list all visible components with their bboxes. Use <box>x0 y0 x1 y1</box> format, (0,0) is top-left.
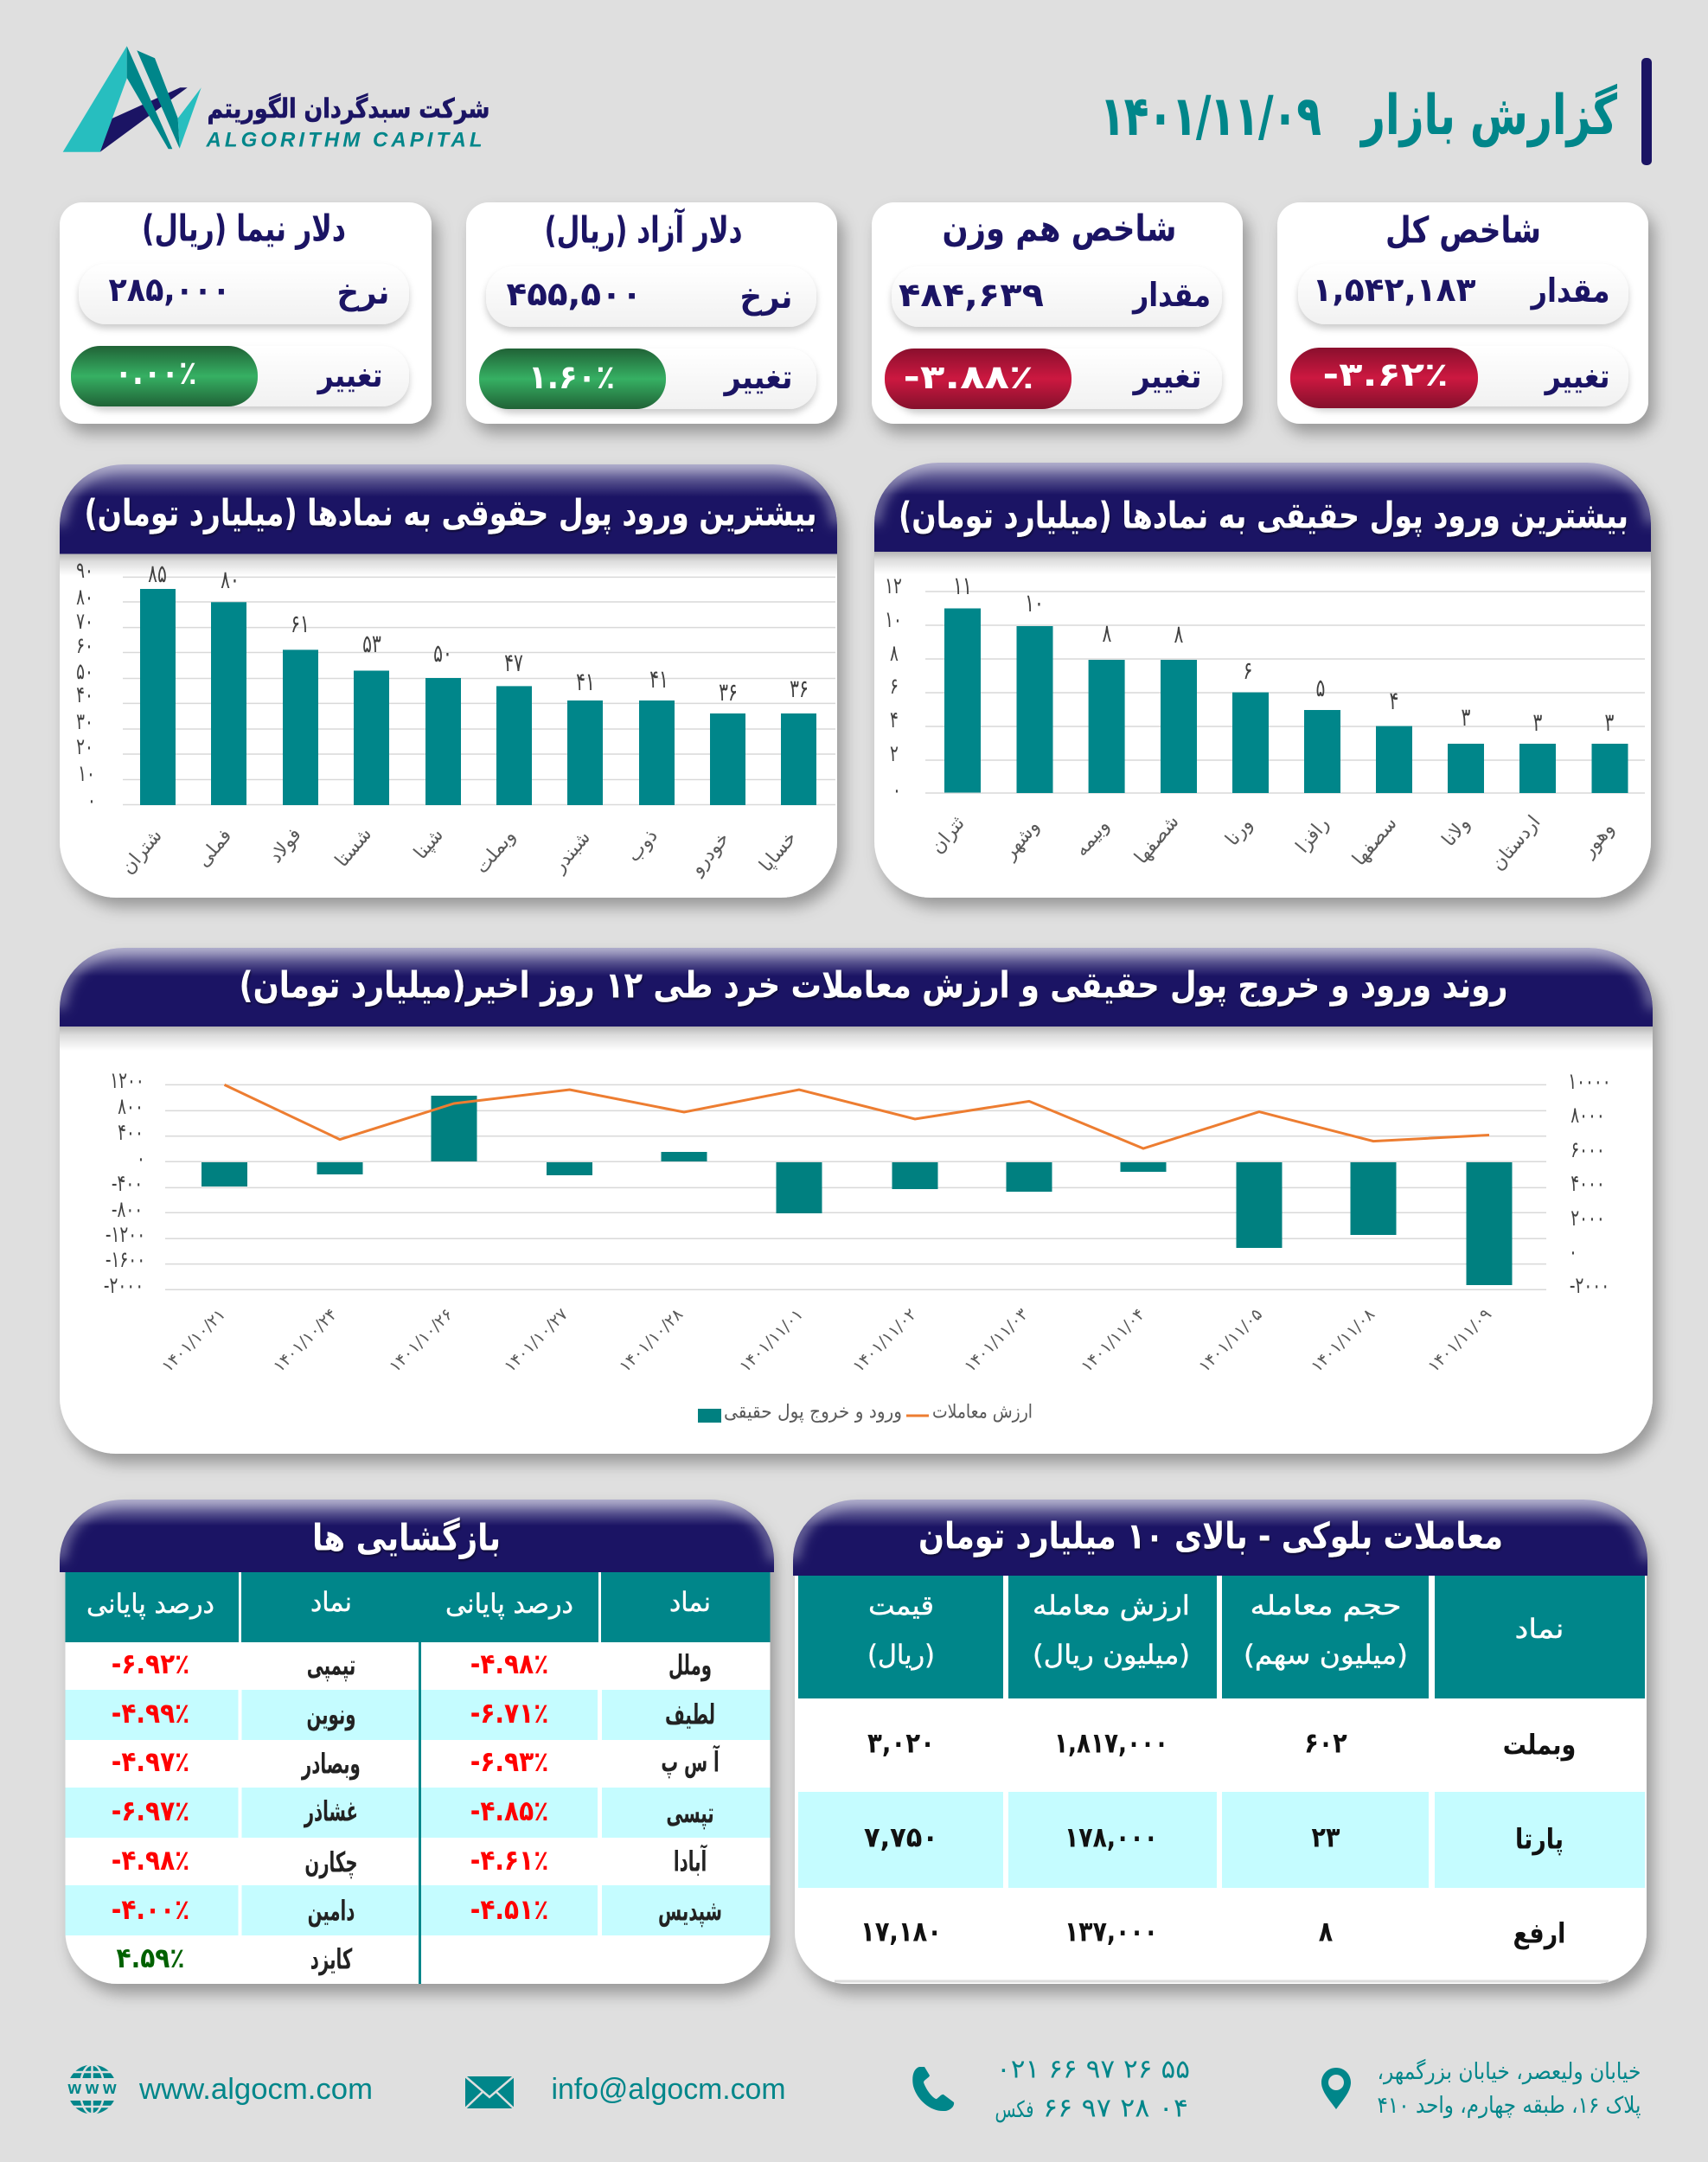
rate pill: ۲۸۵,۰۰۰ <box>109 271 230 309</box>
combo chart: ۱۴۰۱/۱۱/۰۴ <box>1078 1305 1148 1376</box>
table rows: -۴.۹۸٪ <box>470 1648 548 1681</box>
card: equal weight index <box>872 202 1243 424</box>
table rows: ونوین <box>306 1698 356 1731</box>
table rows: ۶۰۲ <box>1304 1727 1347 1760</box>
table rows: -۶.۷۱٪ <box>470 1698 548 1730</box>
combo chart: ۱۴۰۱/۱۱/۰۸ <box>1308 1305 1379 1376</box>
fax number: فکس <box>995 2097 1034 2123</box>
combo chart: ۴۰۰ <box>118 1120 144 1146</box>
change pill: ۱.۶۰٪ <box>528 358 615 396</box>
bar chart: ۱۰ <box>1025 588 1044 617</box>
bar chart: سصفها <box>1348 813 1402 870</box>
bar chart: ۰ <box>892 777 901 803</box>
combo chart: ۱۴۰۱/۱۱/۰۹ <box>1424 1305 1495 1376</box>
change pill <box>1290 346 1628 408</box>
table header: نماد <box>669 1587 711 1618</box>
value pill <box>892 266 1222 327</box>
change pill <box>885 349 1222 409</box>
combo chart: ۲۰۰۰ <box>1570 1206 1605 1231</box>
bar chart: ۴۱ <box>649 664 668 694</box>
combo chart: ۱۴۰۱/۱۰/۲۶ <box>386 1305 457 1376</box>
change pill <box>479 349 816 409</box>
title: گزارش بازار <box>1359 83 1618 148</box>
change pill: تغییر <box>723 358 792 396</box>
bar chart: ۵۳ <box>362 629 381 658</box>
change pill: تغییر <box>1544 357 1610 395</box>
combo chart: ۸۰۰۰ <box>1570 1103 1605 1129</box>
footer: phone <box>912 2055 1190 2124</box>
table rows: آبادا <box>674 1844 707 1878</box>
logo <box>63 46 489 152</box>
bar chart: ذوب <box>623 825 662 867</box>
combo chart <box>104 1068 1611 1376</box>
bar chart: ۸ <box>1174 619 1183 649</box>
icon: envelope <box>465 2076 514 2108</box>
panel heading: روند ورود و خروج پول حقیقی و ارزش معاملات خرد طی ۱۲ روز اخیر(میلیارد تومان) <box>239 963 1507 1007</box>
combo chart: ۱۴۰۱/۱۰/۲۸ <box>616 1305 687 1376</box>
heading accent bar <box>1641 58 1652 165</box>
combo chart: ۸۰۰ <box>118 1094 144 1120</box>
table rows: ۴.۵۹٪ <box>117 1942 184 1975</box>
table rows <box>798 1727 1645 1981</box>
combo chart: ۱۰۰۰۰ <box>1568 1069 1611 1095</box>
combo chart: ۱۴۰۱/۱۰/۲۱ <box>158 1305 229 1376</box>
footer: address <box>1321 2058 1641 2119</box>
table rows: غشاذر <box>303 1795 358 1828</box>
icon: algorithm capital mark <box>63 46 202 152</box>
bar chart: ۳ <box>1605 707 1614 737</box>
website address: www.algocm.com <box>138 2073 373 2106</box>
table rows: تپسی <box>666 1797 714 1830</box>
chart legend: ورود و خروج پول حقیقی <box>724 1401 902 1423</box>
bar chart: ۲ <box>890 741 899 767</box>
bar chart: ۴ <box>890 707 899 733</box>
bar chart: ۵۰ <box>433 638 452 668</box>
icon: globe <box>66 2064 118 2114</box>
value pill: مقدار <box>1131 276 1211 314</box>
table rows: ۱۳۷,۰۰۰ <box>1065 1916 1158 1948</box>
table rows: -۴.۹۷٪ <box>112 1746 189 1779</box>
rate pill: ۴۵۵,۵۰۰ <box>507 275 642 313</box>
panel heading <box>60 1500 774 1572</box>
combo chart: ۱۴۰۱/۱۰/۲۴ <box>270 1305 341 1376</box>
bar chart: ۸ <box>890 641 899 667</box>
table header: قیمت <box>868 1590 934 1622</box>
change pill: ۰.۰۰٪ <box>114 354 197 392</box>
table header: (میلیون سهم) <box>1244 1640 1408 1671</box>
bar chart: ۳۰ <box>76 709 93 735</box>
table rows: وبملت <box>1503 1729 1576 1762</box>
icon: globe: www <box>67 2079 117 2098</box>
report heading <box>1100 58 1652 165</box>
combo chart: ۴۰۰۰ <box>1570 1171 1605 1197</box>
bar chart: ۶۱ <box>291 609 310 638</box>
email address: info@algocm.com <box>552 2073 785 2106</box>
bar chart <box>76 558 835 880</box>
panel heading <box>793 1500 1647 1576</box>
panel: top real money inflow chart <box>874 463 1651 898</box>
combo chart: -۲۰۰۰ <box>1570 1273 1609 1299</box>
bar chart: ۱۰ <box>78 761 95 787</box>
table rows: -۴.۶۱٪ <box>470 1845 548 1877</box>
panel heading: بیشترین ورود پول حقوقی به نمادها (میلیارد تومان) <box>85 491 816 534</box>
value pill: مقدار <box>1530 272 1610 310</box>
bar chart: شصفها <box>1130 811 1184 868</box>
card: free market dollar <box>466 202 837 424</box>
bar chart: شبندر <box>547 827 595 877</box>
bar chart: ۸۵ <box>148 559 167 588</box>
bar chart: ۳۶ <box>719 677 738 707</box>
bar chart: ۱۲ <box>885 573 902 599</box>
table rows: -۴.۰۰٪ <box>112 1894 189 1927</box>
table rows: آ س پ <box>661 1744 720 1779</box>
bar chart: ۴۱ <box>576 667 595 696</box>
combo chart: ۱۴۰۱/۱۱/۰۵ <box>1195 1305 1266 1376</box>
chart legend: ارزش معاملات <box>932 1401 1033 1423</box>
table rows: ۱,۸۱۷,۰۰۰ <box>1054 1727 1168 1760</box>
bar chart: فولاد <box>265 824 306 867</box>
panel heading <box>60 948 1653 1027</box>
bar chart: ۸ <box>1103 618 1111 648</box>
table rows: ۸ <box>1319 1916 1333 1948</box>
bar chart: ۶ <box>1244 656 1252 685</box>
table rows: -۴.۵۱٪ <box>470 1894 548 1927</box>
bar chart: ۳ <box>1533 707 1542 737</box>
bar chart: ۶۰ <box>76 633 93 659</box>
footer: email <box>465 2073 785 2108</box>
combo chart: ۶۰۰۰ <box>1570 1137 1605 1163</box>
table rows: لطیف <box>665 1698 715 1731</box>
table rows: ارفع <box>1513 1917 1565 1950</box>
address line two: پلاک ۱۶، طبقه چهارم، واحد ۴۱۰ <box>1377 2093 1641 2119</box>
combo chart: ۱۴۰۱/۱۱/۰۳ <box>961 1305 1032 1376</box>
table rows: شپدیس <box>658 1895 722 1928</box>
table header: حجم معامله <box>1251 1590 1401 1622</box>
bar chart: ۵۰ <box>76 659 93 685</box>
chart legend <box>698 1401 1033 1423</box>
card heading: شاخص هم وزن <box>943 208 1176 251</box>
rate pill: نرخ <box>337 273 389 311</box>
panel: real money flow trend <box>60 948 1653 1454</box>
table rows: ۳,۰۲۰ <box>867 1727 935 1760</box>
table rows: ۷,۷۵۰ <box>864 1821 938 1854</box>
bar chart: ۱۰ <box>885 607 902 633</box>
report date: ۱۴۰۱/۱۱/۰۹ <box>1100 85 1321 147</box>
bar chart: ۵ <box>1316 673 1325 702</box>
bar chart: شپنا <box>410 824 448 864</box>
bar chart: ۰ <box>87 788 96 814</box>
panel: openings table <box>60 1500 774 1984</box>
change pill <box>71 346 409 406</box>
panel heading: بازگشایی ها <box>312 1517 501 1558</box>
change pill: تغییر <box>317 356 382 394</box>
phone number: ۰۲۱ ۶۶ ۹۷ ۲۶ ۵۵ <box>996 2055 1190 2084</box>
address line one: خیابان ولیعصر، خیابان بزرگمهر، <box>1377 2058 1641 2085</box>
bar chart: ۹۰ <box>76 558 93 584</box>
table rows: کایزد <box>310 1943 353 1976</box>
table rows: تپمپی <box>307 1649 355 1682</box>
bar chart: ۸۰ <box>221 565 240 594</box>
bar chart: ولانا <box>1438 813 1475 851</box>
change pill: -۳.۶۲٪ <box>1323 355 1448 393</box>
bar chart: ثتران <box>926 813 969 858</box>
table rows: -۶.۹۲٪ <box>112 1648 189 1681</box>
bar chart: ورنا <box>1221 814 1257 850</box>
panel heading: معاملات بلوکی - بالای ۱۰ میلیارد تومان <box>918 1515 1503 1558</box>
bar chart: شستا <box>331 823 376 872</box>
bar chart: ۱۱ <box>953 571 972 600</box>
footer: website <box>66 2064 373 2114</box>
logo persian name: شرکت سبدگردان الگوریتم <box>208 93 489 125</box>
table header: درصد پایانی <box>445 1589 573 1620</box>
bar chart: وبملت <box>471 826 520 878</box>
value pill <box>1298 264 1628 324</box>
combo chart: -۱۲۰۰ <box>106 1222 145 1248</box>
rate pill <box>79 264 409 324</box>
bar chart: ۳ <box>1462 702 1470 732</box>
card: nima dollar <box>60 202 432 424</box>
table header: (ریال) <box>867 1640 935 1671</box>
combo chart: ۱۴۰۱/۱۱/۰۲ <box>849 1305 920 1376</box>
combo chart: -۲۰۰۰ <box>104 1273 144 1299</box>
value pill: ۴۸۴,۶۳۹ <box>899 276 1044 314</box>
bar chart: ۲۰ <box>76 734 93 760</box>
table rows: پارتا <box>1515 1823 1564 1856</box>
table rows: -۶.۹۷٪ <box>112 1795 189 1828</box>
panel: top legal money inflow chart <box>60 464 837 898</box>
table rows: -۴.۹۸٪ <box>112 1845 189 1877</box>
table rows <box>66 1642 770 1984</box>
combo chart: ۰ <box>1569 1239 1577 1265</box>
bar chart: ۷۰ <box>76 609 93 635</box>
combo chart: -۸۰۰ <box>112 1197 143 1223</box>
table rows: وملل <box>668 1649 712 1682</box>
combo chart: -۴۰۰ <box>112 1171 143 1197</box>
table rows: ۲۳ <box>1312 1821 1340 1854</box>
panel heading <box>874 463 1651 552</box>
card heading: دلار آزاد (ریال) <box>545 208 742 251</box>
bar chart: ۸۰ <box>76 585 93 611</box>
table rows: -۴.۹۹٪ <box>112 1698 189 1730</box>
bar chart: ۴ <box>1390 686 1398 715</box>
bar chart: وهور <box>1577 818 1619 862</box>
table rows: دامین <box>308 1895 355 1928</box>
panel: block trades table <box>793 1500 1647 1984</box>
rate pill: نرخ <box>740 278 792 316</box>
table rows: چکارن <box>304 1846 358 1879</box>
bar chart: رافزا <box>1292 814 1334 857</box>
bar chart: وبیمه <box>1071 816 1114 860</box>
fax number: ۶۶ ۹۷ ۲۸ ۰۴ <box>1043 2093 1188 2124</box>
table header <box>798 1576 1645 1698</box>
card: total index <box>1277 202 1648 424</box>
value pill: ۱,۵۴۲,۱۸۳ <box>1313 271 1475 309</box>
bar chart: شتران <box>117 825 167 879</box>
bar chart: ۴۷ <box>504 648 523 677</box>
combo chart: ۱۴۰۱/۱۰/۲۷ <box>501 1305 572 1376</box>
table rows: وبصادر <box>300 1748 361 1781</box>
table rows: ۱۷,۱۸۰ <box>860 1916 942 1948</box>
table header <box>66 1572 770 1642</box>
table header: (میلیون ریال) <box>1033 1640 1190 1671</box>
table rows: -۴.۸۵٪ <box>470 1795 548 1828</box>
combo chart: ۱۴۰۱/۱۱/۰۱ <box>736 1305 807 1376</box>
combo chart: -۱۶۰۰ <box>106 1247 145 1273</box>
bar chart: خساپا <box>755 828 802 876</box>
change pill: تغییر <box>1132 357 1202 395</box>
bar chart: فملی <box>193 825 236 872</box>
table header: نماد <box>1515 1614 1564 1645</box>
combo chart: ۰ <box>137 1146 145 1172</box>
bar chart: ۶ <box>890 674 899 700</box>
card heading: دلار نیما (ریال) <box>142 208 346 249</box>
bar chart: اردستان <box>1487 811 1545 875</box>
table header: نماد <box>310 1587 352 1618</box>
panel heading <box>60 464 837 553</box>
logo latin name: ALGORITHM CAPITAL <box>206 128 483 152</box>
table rows: -۶.۹۳٪ <box>470 1746 548 1779</box>
combo chart: ۱۲۰۰ <box>110 1068 144 1094</box>
icon: phone <box>912 2067 954 2111</box>
table header: ارزش معامله <box>1033 1590 1190 1622</box>
bar chart: خودرو <box>686 828 734 880</box>
bar chart: وشهر <box>998 816 1044 864</box>
bar chart: ۳۶ <box>790 674 809 703</box>
table rows: ۱۷۸,۰۰۰ <box>1065 1821 1158 1854</box>
icon: map pin <box>1321 2068 1351 2109</box>
card heading: شاخص کل <box>1385 209 1541 253</box>
bar chart: ۴۰ <box>76 682 93 708</box>
rate pill <box>486 266 816 327</box>
table header: درصد پایانی <box>86 1589 214 1620</box>
bar chart <box>885 571 1645 875</box>
change pill: -۳.۸۸٪ <box>903 358 1034 396</box>
